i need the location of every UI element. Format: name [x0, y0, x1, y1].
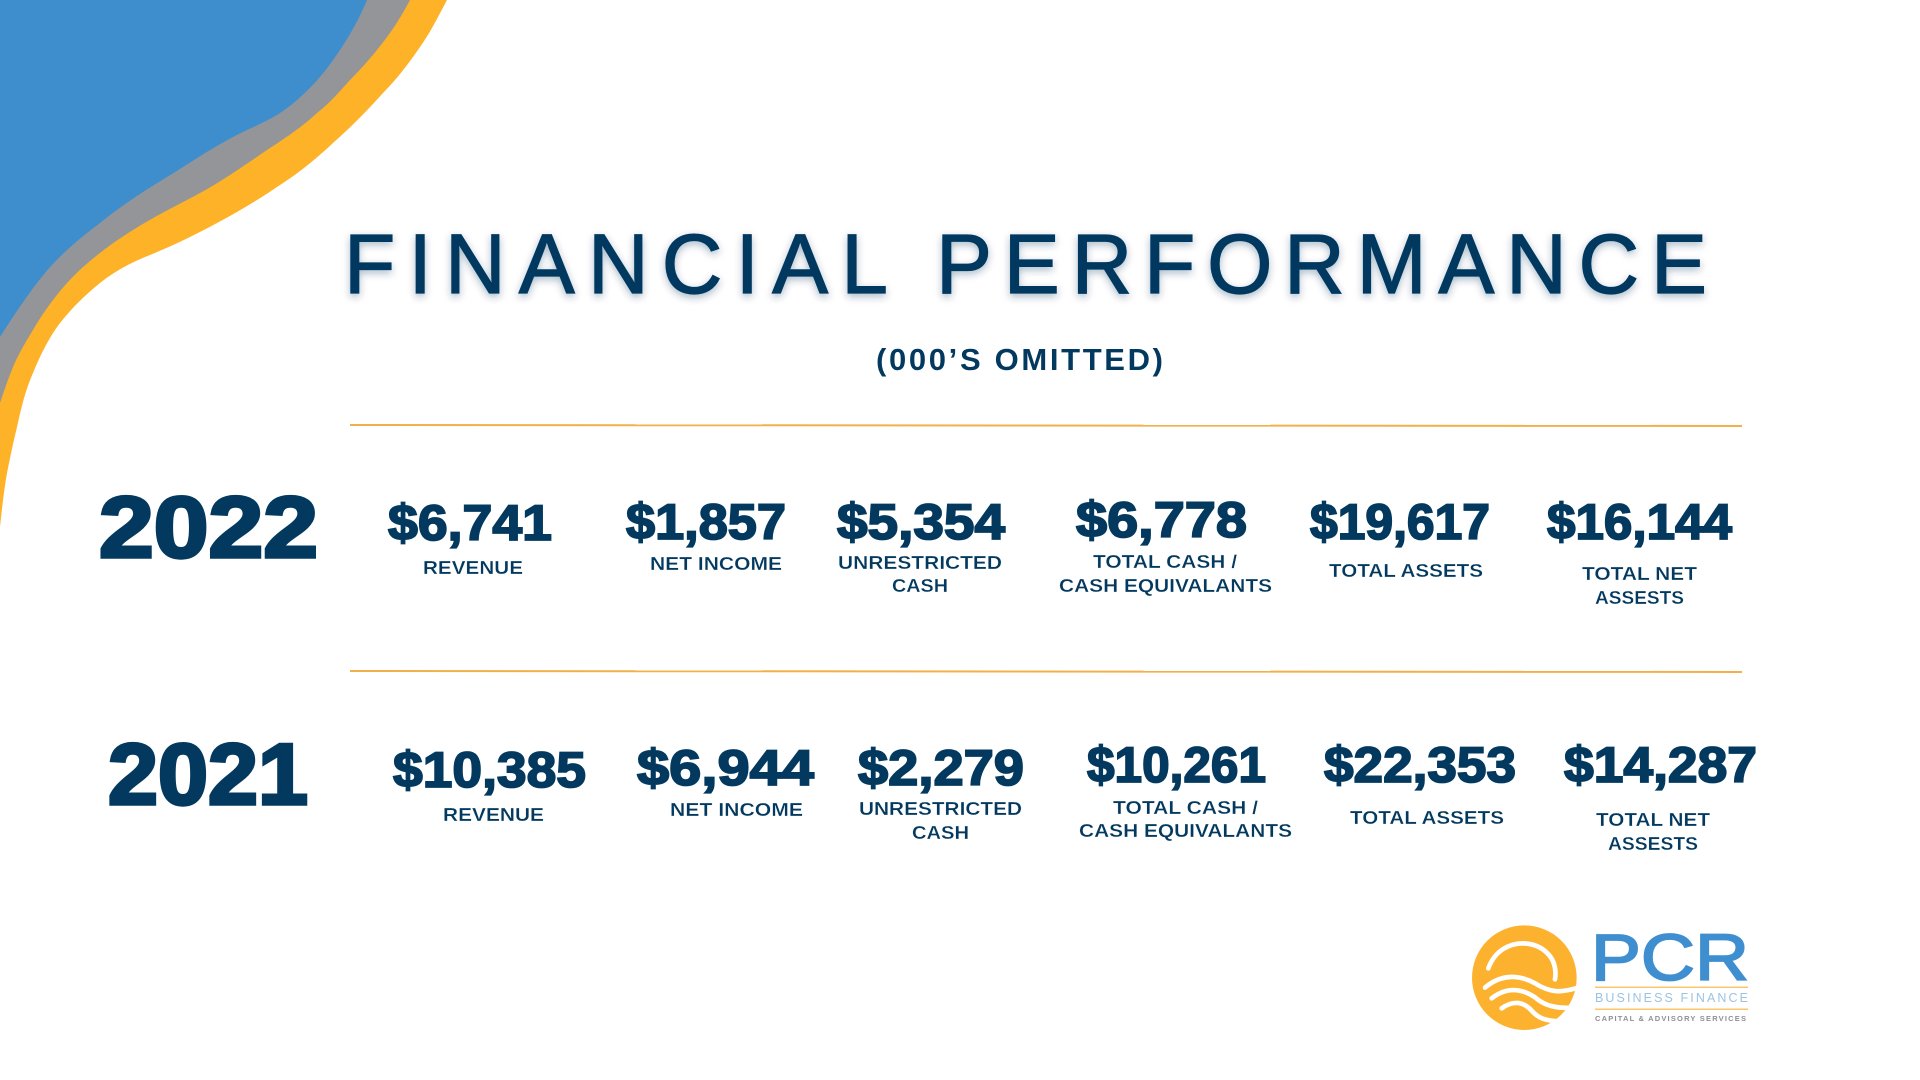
row: 2022 — [99, 480, 1732, 608]
metric: revenue 2022: REVENUE — [423, 557, 523, 578]
title: FINANCIAL — [344, 217, 888, 311]
title: PERFORMANCE — [936, 217, 1707, 311]
metric: total cash 2022: $6,778 — [1076, 492, 1247, 548]
metric: unrestricted cash 2021 — [858, 740, 1024, 843]
logo: PCR Business Finance: BUSINESS FINANCE — [1595, 991, 1748, 1005]
metric: total net assets 2021: $14,287 — [1564, 737, 1757, 793]
metric: total net assets 2022: $16,144 — [1547, 494, 1732, 550]
metric: revenue 2021: REVENUE — [443, 804, 544, 825]
metric: net income 2021: $6,944 — [637, 740, 814, 796]
metric: total assets 2021 — [1324, 737, 1516, 828]
metric: total net assets 2022: TOTAL NET — [1582, 563, 1698, 584]
metric: revenue 2021: $10,385 — [393, 742, 586, 798]
title — [344, 217, 1707, 311]
metric: total cash 2022: TOTAL CASH / — [1093, 551, 1237, 572]
metric: total cash 2021: TOTAL CASH / — [1113, 797, 1258, 818]
logo: PCR Business Finance: CAPITAL & ADVISORY SERVICES — [1595, 1014, 1746, 1023]
metric: total cash 2022 — [1059, 492, 1272, 596]
metric: total cash 2022: CASH EQUIVALANTS — [1059, 575, 1272, 596]
metric: total net assets 2022 — [1547, 494, 1732, 608]
metric: total net assets 2021: TOTAL NET — [1596, 809, 1711, 830]
metric: total assets 2021: $22,353 — [1324, 737, 1516, 793]
metric: total assets 2022: TOTAL ASSETS — [1329, 560, 1483, 581]
row: 2021 — [108, 727, 1757, 854]
metric: net income 2021 — [637, 740, 814, 820]
logo wordmark: PCR — [1591, 920, 1749, 994]
metric: total assets 2022: $19,617 — [1310, 494, 1490, 550]
metric: revenue 2022 — [388, 495, 552, 578]
metric: total net assets 2022: ASSESTS — [1595, 587, 1684, 608]
metric: net income 2022: $1,857 — [626, 494, 786, 550]
metric: unrestricted cash 2022: UNRESTRICTED — [838, 552, 1002, 573]
metric: net income 2021: NET INCOME — [670, 799, 803, 820]
metric: revenue 2022: $6,741 — [388, 495, 552, 551]
icon: sun over waves — [1472, 925, 1585, 1030]
metric: net income 2022 — [626, 494, 786, 574]
year 2021: 2021 — [108, 727, 308, 823]
subtitle: (000’S OMITTED) — [876, 342, 1163, 377]
metric: unrestricted cash 2022 — [837, 494, 1005, 596]
metric: total assets 2022 — [1310, 494, 1490, 581]
metric: unrestricted cash 2021: UNRESTRICTED — [859, 798, 1022, 819]
metric: total net assets 2021: ASSESTS — [1608, 833, 1698, 854]
metric: total net assets 2021 — [1564, 737, 1757, 854]
metric: unrestricted cash 2022: CASH — [892, 575, 948, 596]
metric: revenue 2021 — [393, 742, 586, 825]
metric: unrestricted cash 2022: $5,354 — [837, 494, 1005, 550]
metric: total cash 2021: $10,261 — [1087, 737, 1266, 793]
logo: PCR Business Finance — [1472, 920, 1749, 1030]
year 2022: 2022 — [99, 480, 318, 576]
metric: net income 2022: NET INCOME — [650, 553, 782, 574]
decorative corner waves — [0, 0, 447, 527]
metric: unrestricted cash 2021: CASH — [912, 822, 969, 843]
metric: total cash 2021: CASH EQUIVALANTS — [1079, 820, 1292, 841]
metric: total cash 2021 — [1079, 737, 1292, 841]
metric: unrestricted cash 2021: $2,279 — [858, 740, 1024, 796]
metric: total assets 2021: TOTAL ASSETS — [1350, 807, 1504, 828]
